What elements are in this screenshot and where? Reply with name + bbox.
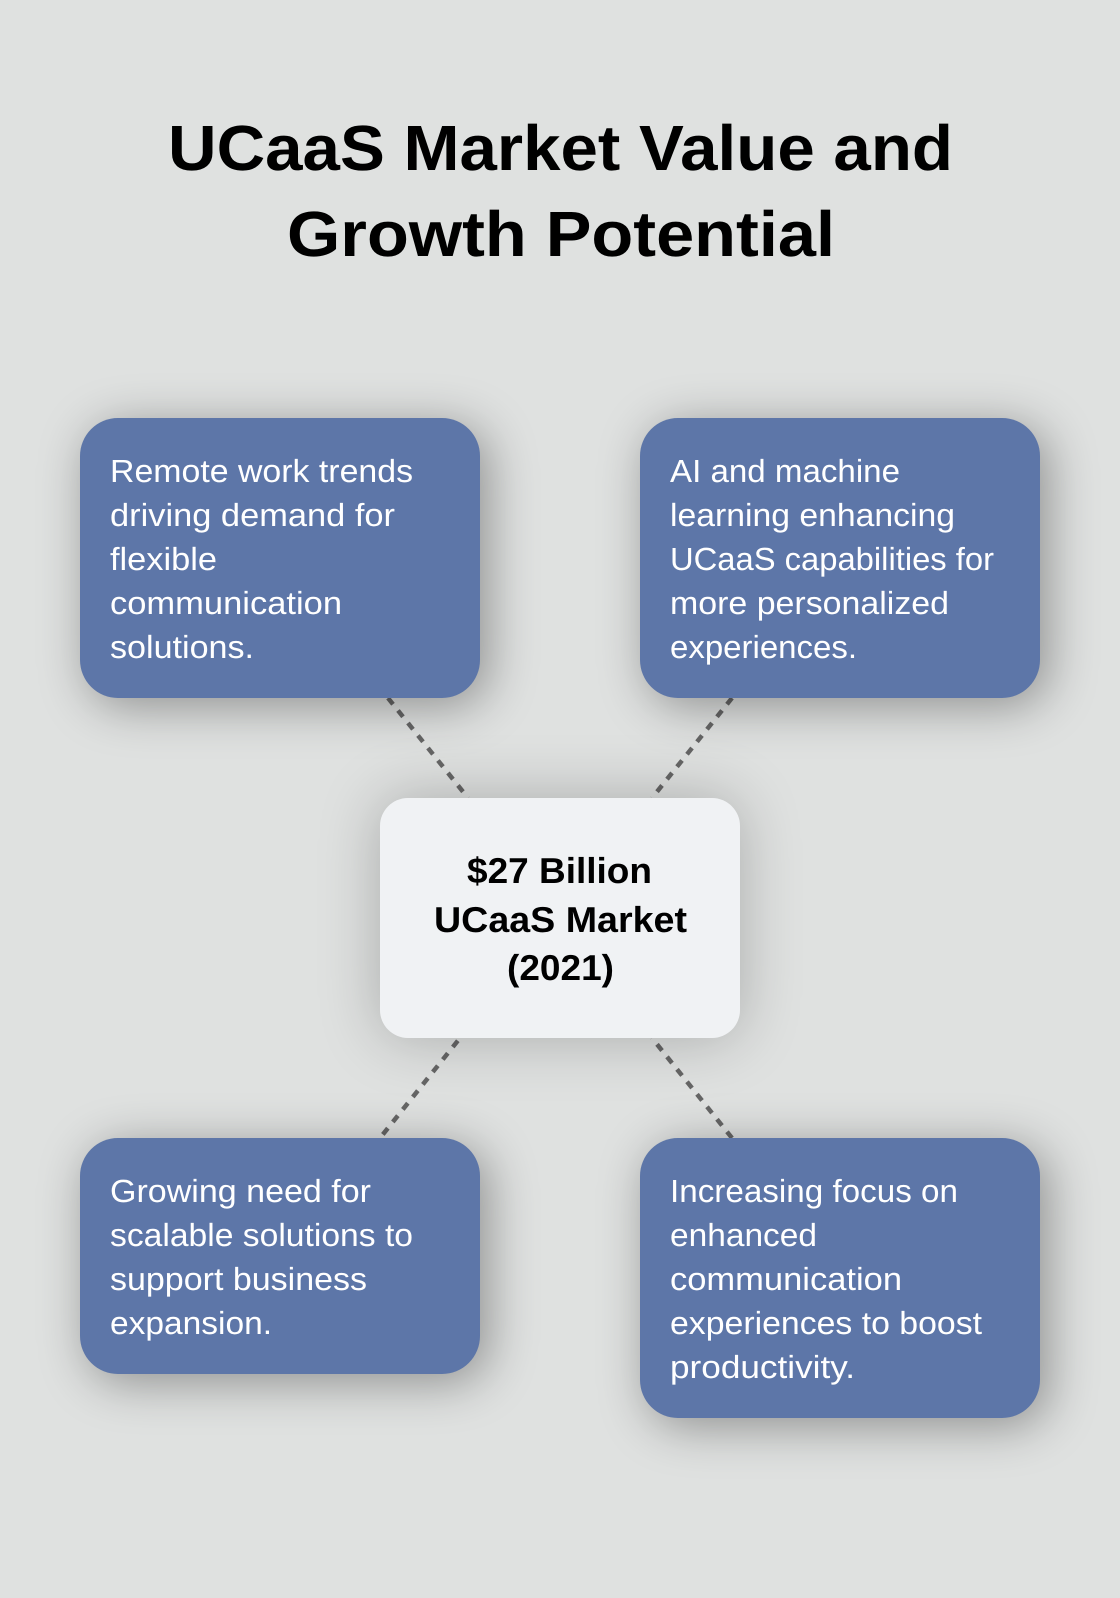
- title: Growth Potential: [287, 198, 835, 270]
- panel: center market value: [380, 798, 740, 1038]
- panel: remote work trends: flexible: [110, 541, 217, 577]
- panel: scalable solutions: expansion.: [110, 1305, 272, 1341]
- panel: enhanced communication: productivity.: [670, 1349, 855, 1385]
- panel: AI and machine learning: learning enhancing: [670, 497, 955, 533]
- panel: enhanced communication: experiences to boost: [670, 1305, 982, 1341]
- panel: scalable solutions: scalable solutions to: [110, 1217, 413, 1253]
- title: [168, 112, 953, 270]
- panel: center market value: $27 Billion: [467, 850, 652, 891]
- panel: AI and machine learning: AI and machine: [670, 453, 900, 489]
- panel: enhanced communication: enhanced: [670, 1217, 817, 1253]
- panel: enhanced communication: [640, 1138, 1040, 1418]
- panel: scalable solutions: [80, 1138, 480, 1374]
- panel: enhanced communication: Increasing focus on: [670, 1173, 958, 1209]
- title: UCaaS Market Value and: [168, 112, 953, 184]
- panel: AI and machine learning: more personalized: [670, 585, 949, 621]
- panel: enhanced communication: communication: [670, 1261, 902, 1297]
- panel: AI and machine learning: [640, 418, 1040, 698]
- panel: AI and machine learning: experiences.: [670, 629, 857, 665]
- panel: remote work trends: communication: [110, 585, 342, 621]
- connector: top-right card to center: [652, 698, 732, 798]
- panel: remote work trends: [80, 418, 480, 698]
- panel: scalable solutions: Growing need for: [110, 1173, 371, 1209]
- connector: bottom-right card to center: [652, 1038, 732, 1138]
- panel: center market value: (2021): [507, 947, 614, 988]
- panel: remote work trends: Remote work trends: [110, 453, 413, 489]
- panel: scalable solutions: support business: [110, 1261, 367, 1297]
- panel: center market value: UCaaS Market: [434, 899, 687, 940]
- connector: top-left card to center: [388, 698, 468, 798]
- panel: AI and machine learning: UCaaS capabilities for: [670, 541, 994, 577]
- panel: remote work trends: driving demand for: [110, 497, 395, 533]
- connector: bottom-left card to center: [380, 1038, 460, 1138]
- panel: remote work trends: solutions.: [110, 629, 254, 665]
